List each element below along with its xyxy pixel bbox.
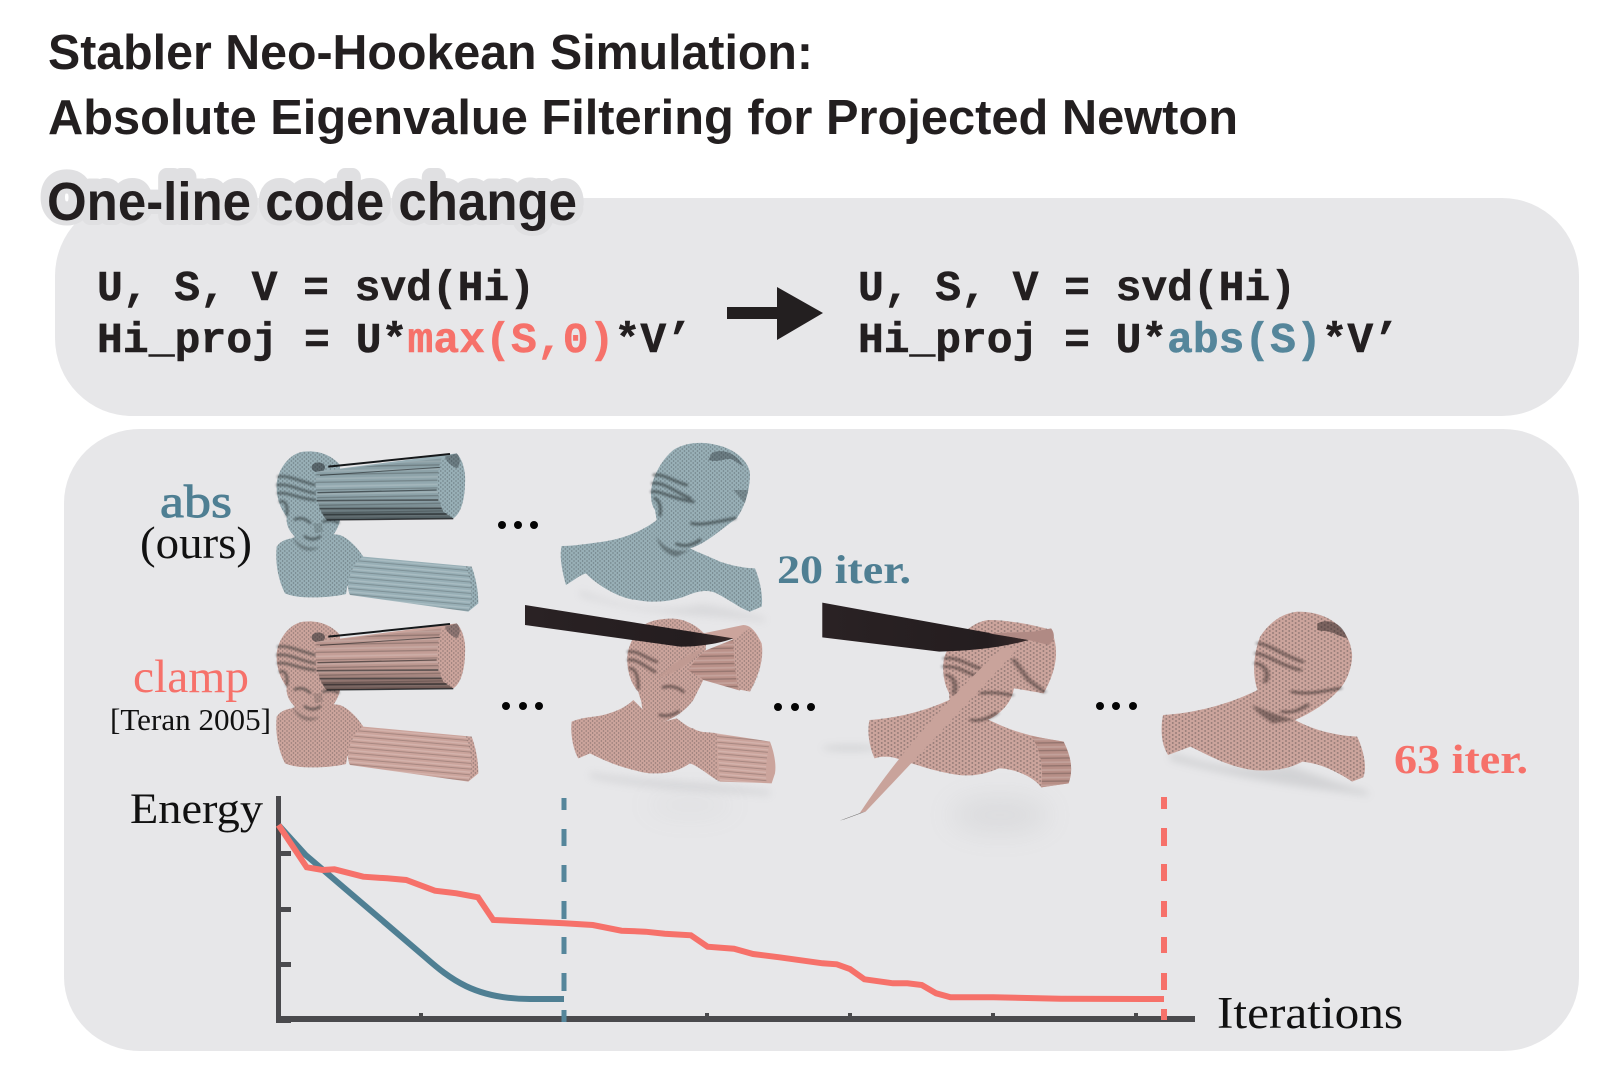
mesh: clamp later bust with blade and spike bbox=[822, 603, 1071, 821]
abs energy curve bbox=[278, 825, 564, 999]
label: clamp [Teran 2005] bbox=[110, 651, 271, 737]
chart: energy vs iterations bbox=[130, 786, 1403, 1038]
clamp stop marker bbox=[1161, 797, 1167, 1020]
mesh: abs final bust bbox=[561, 443, 762, 612]
heading: one-line code change: One-line code change bbox=[47, 168, 577, 228]
label: abs (ours): abs bbox=[160, 476, 232, 528]
label: clamp [Teran 2005]: clamp bbox=[133, 651, 249, 703]
mesh: clamp initial deformed bust bbox=[276, 621, 478, 782]
y axis label: Energy bbox=[130, 786, 264, 833]
label: 63 iterations: 63 iter. bbox=[1394, 736, 1528, 782]
label: 20 iterations: 20 iter. bbox=[777, 547, 911, 592]
code: abs version: U, S, V = svd(Hi) bbox=[858, 264, 1296, 313]
x axis label: Iterations bbox=[1217, 988, 1403, 1038]
code: clamp version bbox=[97, 264, 692, 365]
code: clamp version: Hi_proj = U*max(S,0)*V’ bbox=[97, 316, 692, 365]
title: Stabler Neo-Hookean Simulation: bbox=[48, 26, 813, 80]
title bbox=[48, 26, 1238, 145]
dots: ellipsis markers bbox=[498, 521, 1137, 711]
title: Absolute Eigenvalue Filtering for Projected Newton bbox=[48, 91, 1238, 145]
axes and ticks bbox=[276, 796, 1195, 1023]
abs stop marker bbox=[562, 798, 566, 1022]
label: abs (ours): (ours) bbox=[140, 517, 252, 568]
label: abs (ours) bbox=[140, 476, 252, 568]
panel: results background bbox=[64, 429, 1579, 1051]
code: clamp version: U, S, V = svd(Hi) bbox=[97, 264, 535, 313]
panel: code change background bbox=[55, 198, 1579, 416]
label: clamp [Teran 2005]: [Teran 2005] bbox=[110, 702, 271, 737]
mesh: clamp final bust bbox=[1162, 612, 1365, 782]
arrow bbox=[727, 287, 823, 340]
clamp energy curve bbox=[278, 825, 1164, 999]
soft floor shadows bbox=[580, 590, 1370, 833]
code: abs version: Hi_proj = U*abs(S)*V’ bbox=[858, 316, 1399, 365]
mesh: abs initial deformed bust bbox=[276, 451, 478, 612]
mesh: clamp mid bust with blade bbox=[525, 605, 775, 783]
heading: one-line code change: One-line code change bbox=[47, 172, 577, 232]
code: abs version bbox=[858, 264, 1399, 365]
